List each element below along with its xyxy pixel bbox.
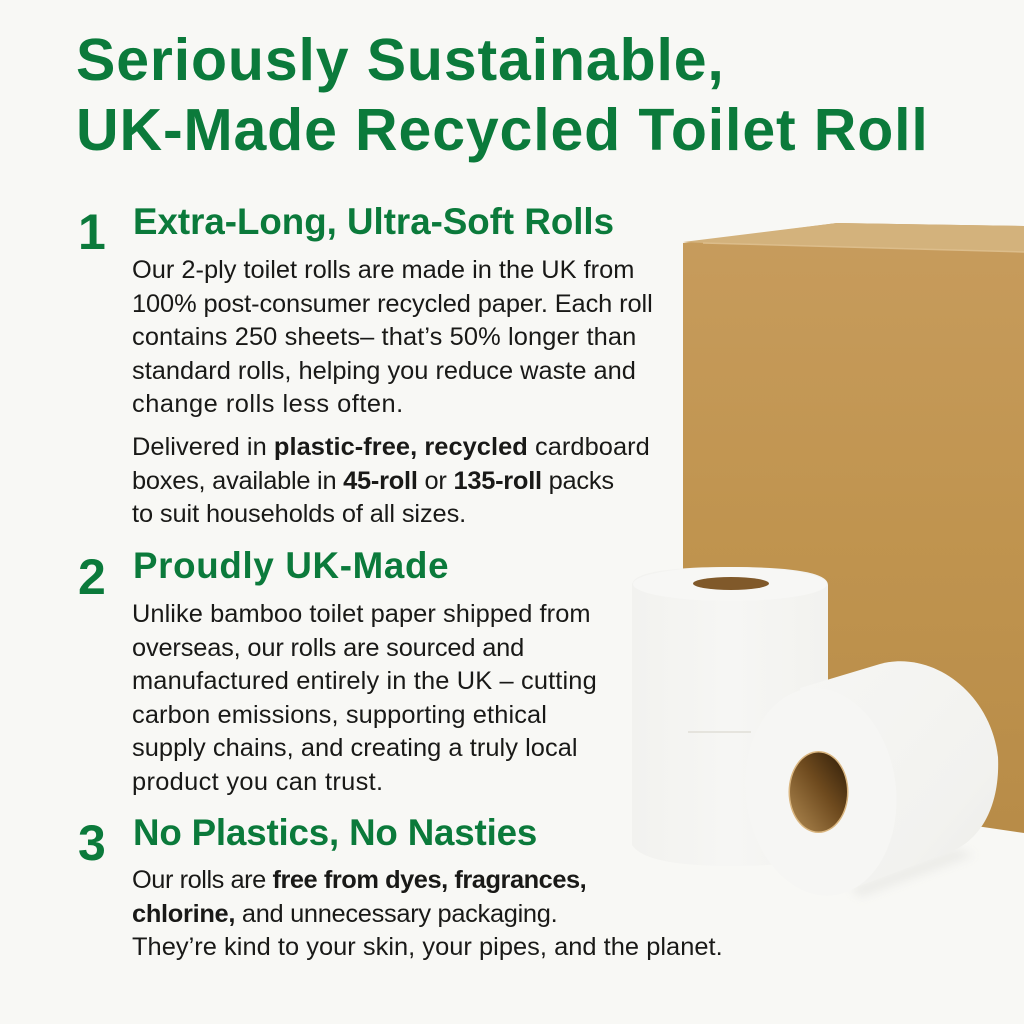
number 3: 3 [78, 815, 106, 871]
text block 1b: Delivered in plastic-free, recycled cardboard [132, 433, 650, 461]
title: UK-Made Recycled Toilet Roll [76, 97, 929, 163]
icon: stacked rolls [632, 567, 828, 866]
title: Seriously Sustainable, [76, 27, 725, 93]
text block 3: Our rolls are free from dyes, fragrances, [132, 866, 586, 894]
text block 1: 100% post-consumer recycled paper. Each roll [132, 290, 653, 318]
text block 2 [132, 600, 597, 796]
text block 1 [132, 256, 653, 418]
number 1: 1 [78, 204, 106, 260]
text block 1b: to suit households of all sizes. [132, 500, 466, 528]
heading 2: Proudly UK-Made [133, 545, 449, 586]
heading 1: Extra-Long, Ultra-Soft Rolls [133, 201, 614, 242]
text block 2: carbon emissions, supporting ethical [132, 701, 547, 729]
text block 2: Unlike bamboo toilet paper shipped from [132, 600, 591, 628]
title [76, 27, 929, 163]
text block 1: change rolls less often. [132, 390, 404, 418]
text block 2: manufactured entirely in the UK – cutting [132, 667, 597, 695]
text block 1b: boxes, available in 45-roll or 135-roll packs [132, 467, 614, 495]
number 2: 2 [78, 549, 106, 605]
heading 3: No Plastics, No Nasties [133, 812, 537, 853]
text block 2: supply chains, and creating a truly local [132, 734, 578, 762]
text block 2: overseas, our rolls are sourced and [132, 634, 524, 662]
text block 1: Our 2-ply toilet rolls are made in the UK from [132, 256, 634, 284]
text block 3: chlorine, and unnecessary packaging. [132, 900, 557, 928]
text block 1b [132, 433, 650, 528]
icon: front roll [734, 661, 998, 904]
icon: cardboard box [683, 223, 1024, 833]
text block 3: They’re kind to your skin, your pipes, and the planet. [132, 933, 723, 961]
text block 1: contains 250 sheets– that’s 50% longer than [132, 323, 636, 351]
text block 3 [132, 866, 723, 961]
text block 2: product you can trust. [132, 768, 383, 796]
text block 1: standard rolls, helping you reduce waste and [132, 357, 636, 385]
